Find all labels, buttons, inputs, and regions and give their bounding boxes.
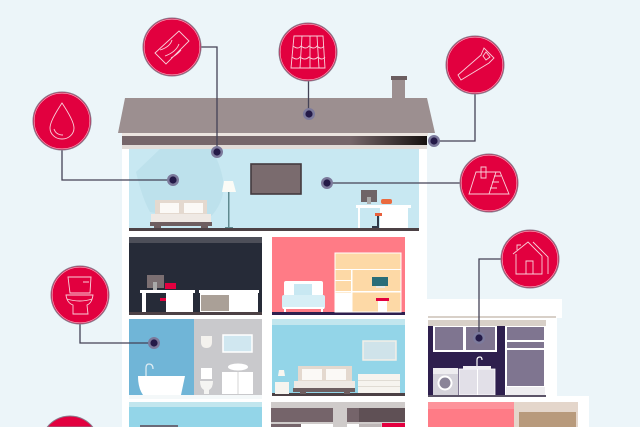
icon: hand saw <box>446 36 504 94</box>
room: attic <box>129 149 419 229</box>
room: blue bedroom <box>272 319 405 396</box>
pin: kitchen <box>473 332 485 344</box>
wall screen <box>251 164 301 194</box>
pin: ceiling <box>211 146 223 158</box>
room: dark study <box>129 237 262 315</box>
room: lower middle <box>271 402 405 427</box>
damp patch <box>136 149 224 222</box>
upper cabinets <box>433 326 497 352</box>
bathroom floor <box>129 395 262 399</box>
toilet <box>201 368 212 379</box>
bed <box>298 366 352 382</box>
attic floor <box>129 228 419 231</box>
mirror <box>223 335 252 352</box>
icon: wood plank <box>143 18 201 76</box>
bed <box>150 200 212 229</box>
bathtub <box>138 376 185 395</box>
room: lower left <box>129 402 262 427</box>
pin: bathroom <box>148 337 160 349</box>
room: pink bedroom <box>272 237 405 315</box>
icon: roof tiles <box>279 23 337 81</box>
wardrobe <box>507 327 544 340</box>
icon: water drop <box>33 92 91 150</box>
bed <box>284 281 323 296</box>
room: kitchen <box>428 316 556 397</box>
pin: wall damp <box>167 174 179 186</box>
room: bathroom <box>129 319 262 395</box>
icon: partial lower left <box>47 416 93 427</box>
roof eave <box>122 133 428 149</box>
icon: toilet <box>51 266 109 324</box>
side lamp and table <box>278 370 285 376</box>
washing machine <box>433 368 458 395</box>
chimney <box>391 76 407 100</box>
floor lamp <box>222 181 236 229</box>
house body <box>122 146 589 427</box>
ceiling lamp <box>201 336 212 348</box>
roof <box>118 98 435 133</box>
sink unit <box>459 369 495 395</box>
sink and cabinet <box>228 364 248 370</box>
dresser <box>358 374 400 393</box>
connector lines <box>62 47 501 343</box>
pin: insulation <box>321 177 333 189</box>
pin: eave <box>428 135 440 147</box>
pin: roof <box>303 108 315 120</box>
icon: ruler and plan <box>460 154 518 212</box>
icon: house <box>501 230 559 288</box>
mirror <box>363 341 396 360</box>
room: lower right <box>428 402 578 427</box>
desk <box>356 190 411 228</box>
shelves <box>335 253 401 312</box>
kitchen floor <box>428 395 546 397</box>
